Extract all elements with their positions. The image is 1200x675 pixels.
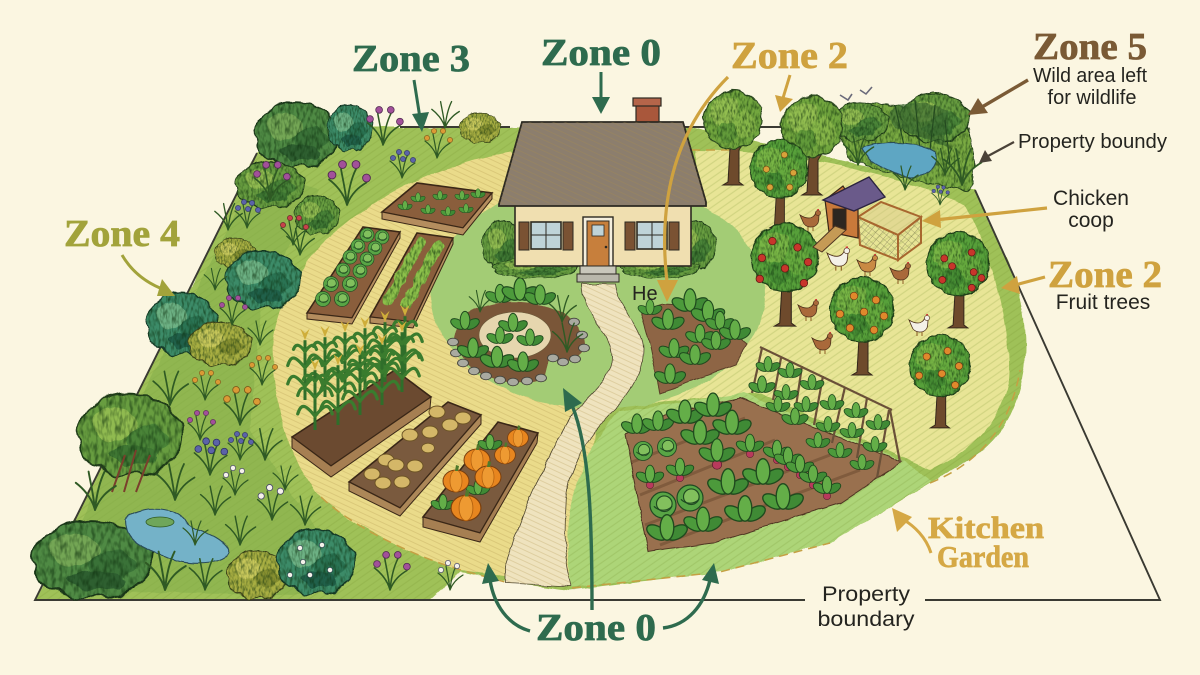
ramp xyxy=(813,226,846,252)
bed: greens xyxy=(370,233,453,328)
text: property boundary: Property xyxy=(822,583,911,606)
pond xyxy=(125,509,229,563)
text: wild area: Wild area left xyxy=(1033,65,1147,87)
ground: meadow shading xyxy=(48,170,330,595)
label: Zone 0 bottom: Zone 0 xyxy=(536,607,656,649)
panel: zone 3 raised beds xyxy=(288,183,538,542)
chimney xyxy=(633,98,661,127)
text: property boundary xyxy=(818,583,915,631)
steps xyxy=(577,266,619,282)
grasses and flowers xyxy=(76,102,463,590)
text: property boundary: boundary xyxy=(818,608,915,631)
run xyxy=(858,202,921,260)
birds xyxy=(840,87,872,100)
text: chicken coop: Chicken xyxy=(1053,187,1129,210)
chicken coop xyxy=(813,177,921,260)
label: Zone 4: Zone 4 xyxy=(64,213,180,255)
ground: zone 1 green xyxy=(431,181,765,409)
ground: meadow and outer green xyxy=(35,127,1026,600)
arrow: Zone 2 long xyxy=(657,77,728,302)
arrow: chicken coop xyxy=(922,208,1047,228)
arrow: kitchen garden xyxy=(892,508,931,553)
panel: orchard trees xyxy=(704,91,989,428)
text: wild area xyxy=(1033,65,1147,109)
right window xyxy=(625,222,679,250)
bed: seedlings xyxy=(382,183,492,235)
arrow: Zone 4 xyxy=(122,255,175,296)
bed: potatoes xyxy=(349,402,481,516)
ground hatch xyxy=(35,127,1026,600)
label: Zone 2 right: Zone 2 xyxy=(1048,254,1162,296)
arrow: Zone 0 top xyxy=(592,72,610,114)
text: wild area: for wildlife xyxy=(1048,87,1136,109)
panel: herb bed xyxy=(637,289,752,393)
tree: apple 2 xyxy=(927,233,989,328)
panel: herb spiral xyxy=(448,278,590,386)
rock ring xyxy=(448,318,590,386)
bed: pumpkins xyxy=(423,422,538,542)
path xyxy=(505,284,643,586)
chickens xyxy=(798,210,930,354)
shrubs top left xyxy=(147,103,500,366)
arrow: Zone 5 xyxy=(968,80,1028,115)
trellis xyxy=(752,347,900,478)
trellis vines xyxy=(747,356,891,471)
label: kitchen garden: Kitchen xyxy=(928,510,1044,545)
arrow: Zone 2 right xyxy=(1001,276,1045,294)
roof xyxy=(499,122,706,206)
wild pond xyxy=(862,144,936,177)
label: kitchen garden xyxy=(928,510,1044,574)
hutch xyxy=(825,186,858,238)
wild thicket xyxy=(832,94,974,190)
label: Zone 5: Zone 5 xyxy=(1033,26,1147,68)
tree: left shade tree xyxy=(704,91,762,185)
arrow: Zone 3 xyxy=(412,80,429,132)
tree: orange 1 xyxy=(750,140,808,228)
arrow: Zone 0 left xyxy=(482,563,530,631)
herbs xyxy=(449,278,583,374)
tree: orange 3 xyxy=(910,336,970,428)
bed: corn xyxy=(288,305,431,477)
soil furrows xyxy=(632,418,860,545)
panel: wild area zone 5 xyxy=(832,87,982,205)
panel: house xyxy=(482,98,716,282)
ground: zone 2 yellow xyxy=(630,150,1009,470)
text: clipped He: He xyxy=(632,283,658,305)
ground: zone 3 yellow xyxy=(273,152,600,586)
tree: orange 2 xyxy=(830,278,894,375)
label: Zone 0 top: Zone 0 xyxy=(541,32,661,74)
arrow: Zone 2 short xyxy=(775,75,793,112)
ground: kitchen garden green xyxy=(568,393,932,587)
text: chicken coop xyxy=(1053,187,1129,232)
shrubs bottom left xyxy=(32,522,355,599)
text: chicken coop: coop xyxy=(1068,209,1114,232)
dashed zone edges xyxy=(321,150,1020,588)
label: Zone 2 top: Zone 2 xyxy=(731,35,848,77)
left window xyxy=(519,222,573,250)
soil ring xyxy=(453,302,585,383)
reeds xyxy=(844,136,982,205)
shrubs by house xyxy=(482,221,716,278)
label: kitchen garden: Garden xyxy=(937,539,1029,574)
panel: zone 4 wild plants xyxy=(32,102,500,599)
bed: lettuce xyxy=(307,227,400,324)
path hatch xyxy=(505,284,643,586)
large shrub with stems xyxy=(78,394,182,492)
ground: zone 3 wash xyxy=(273,152,600,586)
arrow: property boundy xyxy=(979,142,1014,163)
kitchen green hatch xyxy=(568,393,932,587)
text: fruit trees: Fruit trees xyxy=(1056,291,1150,314)
arrow: Zone 0 right xyxy=(663,563,719,628)
hutch door xyxy=(833,209,846,229)
tan spiral floor xyxy=(479,312,551,358)
garden illustration xyxy=(32,87,1160,600)
tree: apple 1 xyxy=(751,224,819,326)
panel: kitchen garden xyxy=(620,347,902,552)
tree: right shade tree xyxy=(782,96,842,195)
crop rows xyxy=(620,393,842,543)
roof hatch xyxy=(499,122,706,204)
door xyxy=(583,217,613,266)
walls xyxy=(515,200,691,266)
text: property boundy: Property boundy xyxy=(1018,131,1167,153)
arrow: Zone 0 up xyxy=(563,388,592,610)
ground: zone 2 wash xyxy=(630,150,1009,470)
property boundary lines xyxy=(35,127,1160,600)
label: Zone 3: Zone 3 xyxy=(352,38,470,80)
hutch roof xyxy=(823,177,885,211)
soil xyxy=(625,398,902,552)
